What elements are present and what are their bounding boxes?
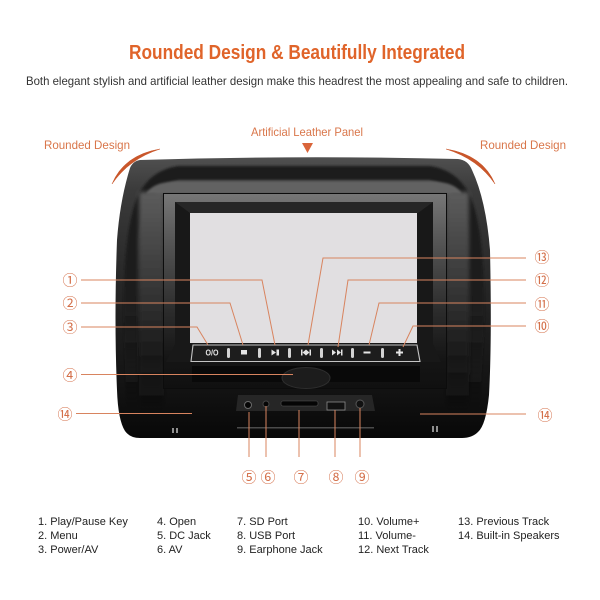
callout numbers: ④ — [62, 368, 78, 384]
legend column 4: 11. Volume- — [358, 530, 416, 542]
callout numbers: ⑫ — [534, 272, 550, 290]
inner dark frame — [166, 202, 441, 362]
legend column 4 — [358, 516, 429, 556]
right side panel — [446, 192, 469, 412]
legend column 5 — [458, 516, 560, 542]
legend — [38, 516, 560, 556]
disc slot — [192, 366, 420, 382]
callout: rounded design left: Rounded Design — [44, 138, 130, 152]
legend column 2: 5. DC Jack — [157, 530, 211, 542]
legend column 3: 8. USB Port — [237, 530, 295, 542]
callout: artificial leather panel — [251, 125, 363, 153]
title: Rounded Design & Beautifully Integrated — [129, 41, 465, 64]
legend column 5: 13. Previous Track — [458, 516, 550, 528]
callout numbers: ⑬ — [534, 250, 550, 266]
legend column 1: 3. Power/AV — [38, 544, 99, 556]
button icons: O/O — [206, 348, 219, 358]
subtitle: Both elegant stylish and artificial leather design make this headrest the most appealing and safe to children. — [26, 74, 568, 88]
legend column 3: 7. SD Port — [237, 516, 288, 528]
headrest monitor — [116, 157, 491, 438]
legend column 2 — [157, 516, 211, 556]
legend column 2: 4. Open — [157, 516, 196, 528]
legend column 4: 12. Next Track — [358, 544, 429, 556]
legend column 3: 9. Earphone Jack — [237, 544, 323, 556]
bezel — [164, 194, 446, 388]
callout numbers: ⑪ — [534, 296, 550, 314]
legend column 4: 10. Volume+ — [358, 516, 419, 528]
callout numbers: ⑩ — [534, 318, 550, 336]
callout: rounded design left — [44, 138, 160, 184]
port panel — [236, 395, 375, 428]
callout: rounded design right: Rounded Design — [480, 138, 566, 152]
legend column 3 — [237, 516, 323, 556]
callout numbers: ③ — [62, 320, 78, 336]
callout: rounded design right — [446, 138, 566, 184]
callout: artificial leather panel: Artificial Leather Panel — [251, 125, 363, 139]
leather band — [124, 166, 484, 410]
callout lines — [76, 258, 526, 457]
frame top highlight — [175, 202, 433, 213]
callout numbers: ⑥ — [260, 470, 276, 486]
callout numbers: ① — [62, 272, 78, 290]
legend column 5: 14. Built-in Speakers — [458, 530, 560, 542]
legend column 1: 2. Menu — [38, 530, 78, 542]
callout numbers: ⑭ — [57, 406, 73, 424]
speaker screw marks — [172, 426, 438, 433]
callout numbers — [57, 250, 553, 486]
callout numbers: ⑦ — [293, 470, 309, 486]
callout numbers: ② — [62, 296, 78, 312]
headrest shell — [116, 157, 491, 438]
legend column 1 — [38, 516, 128, 556]
inner top panel — [146, 181, 462, 194]
legend column 1: 1. Play/Pause Key — [38, 516, 128, 528]
button separators — [227, 348, 384, 358]
left side panel — [139, 192, 164, 412]
callout numbers: ⑤ — [241, 470, 257, 486]
callout numbers: ⑭ — [537, 408, 553, 424]
button strip — [191, 345, 420, 362]
callout numbers: ⑧ — [328, 470, 344, 486]
open button — [282, 368, 330, 388]
screen — [190, 213, 417, 343]
legend column 2: 6. AV — [157, 544, 183, 556]
callout numbers: ⑨ — [354, 470, 370, 486]
button icons — [206, 348, 403, 358]
